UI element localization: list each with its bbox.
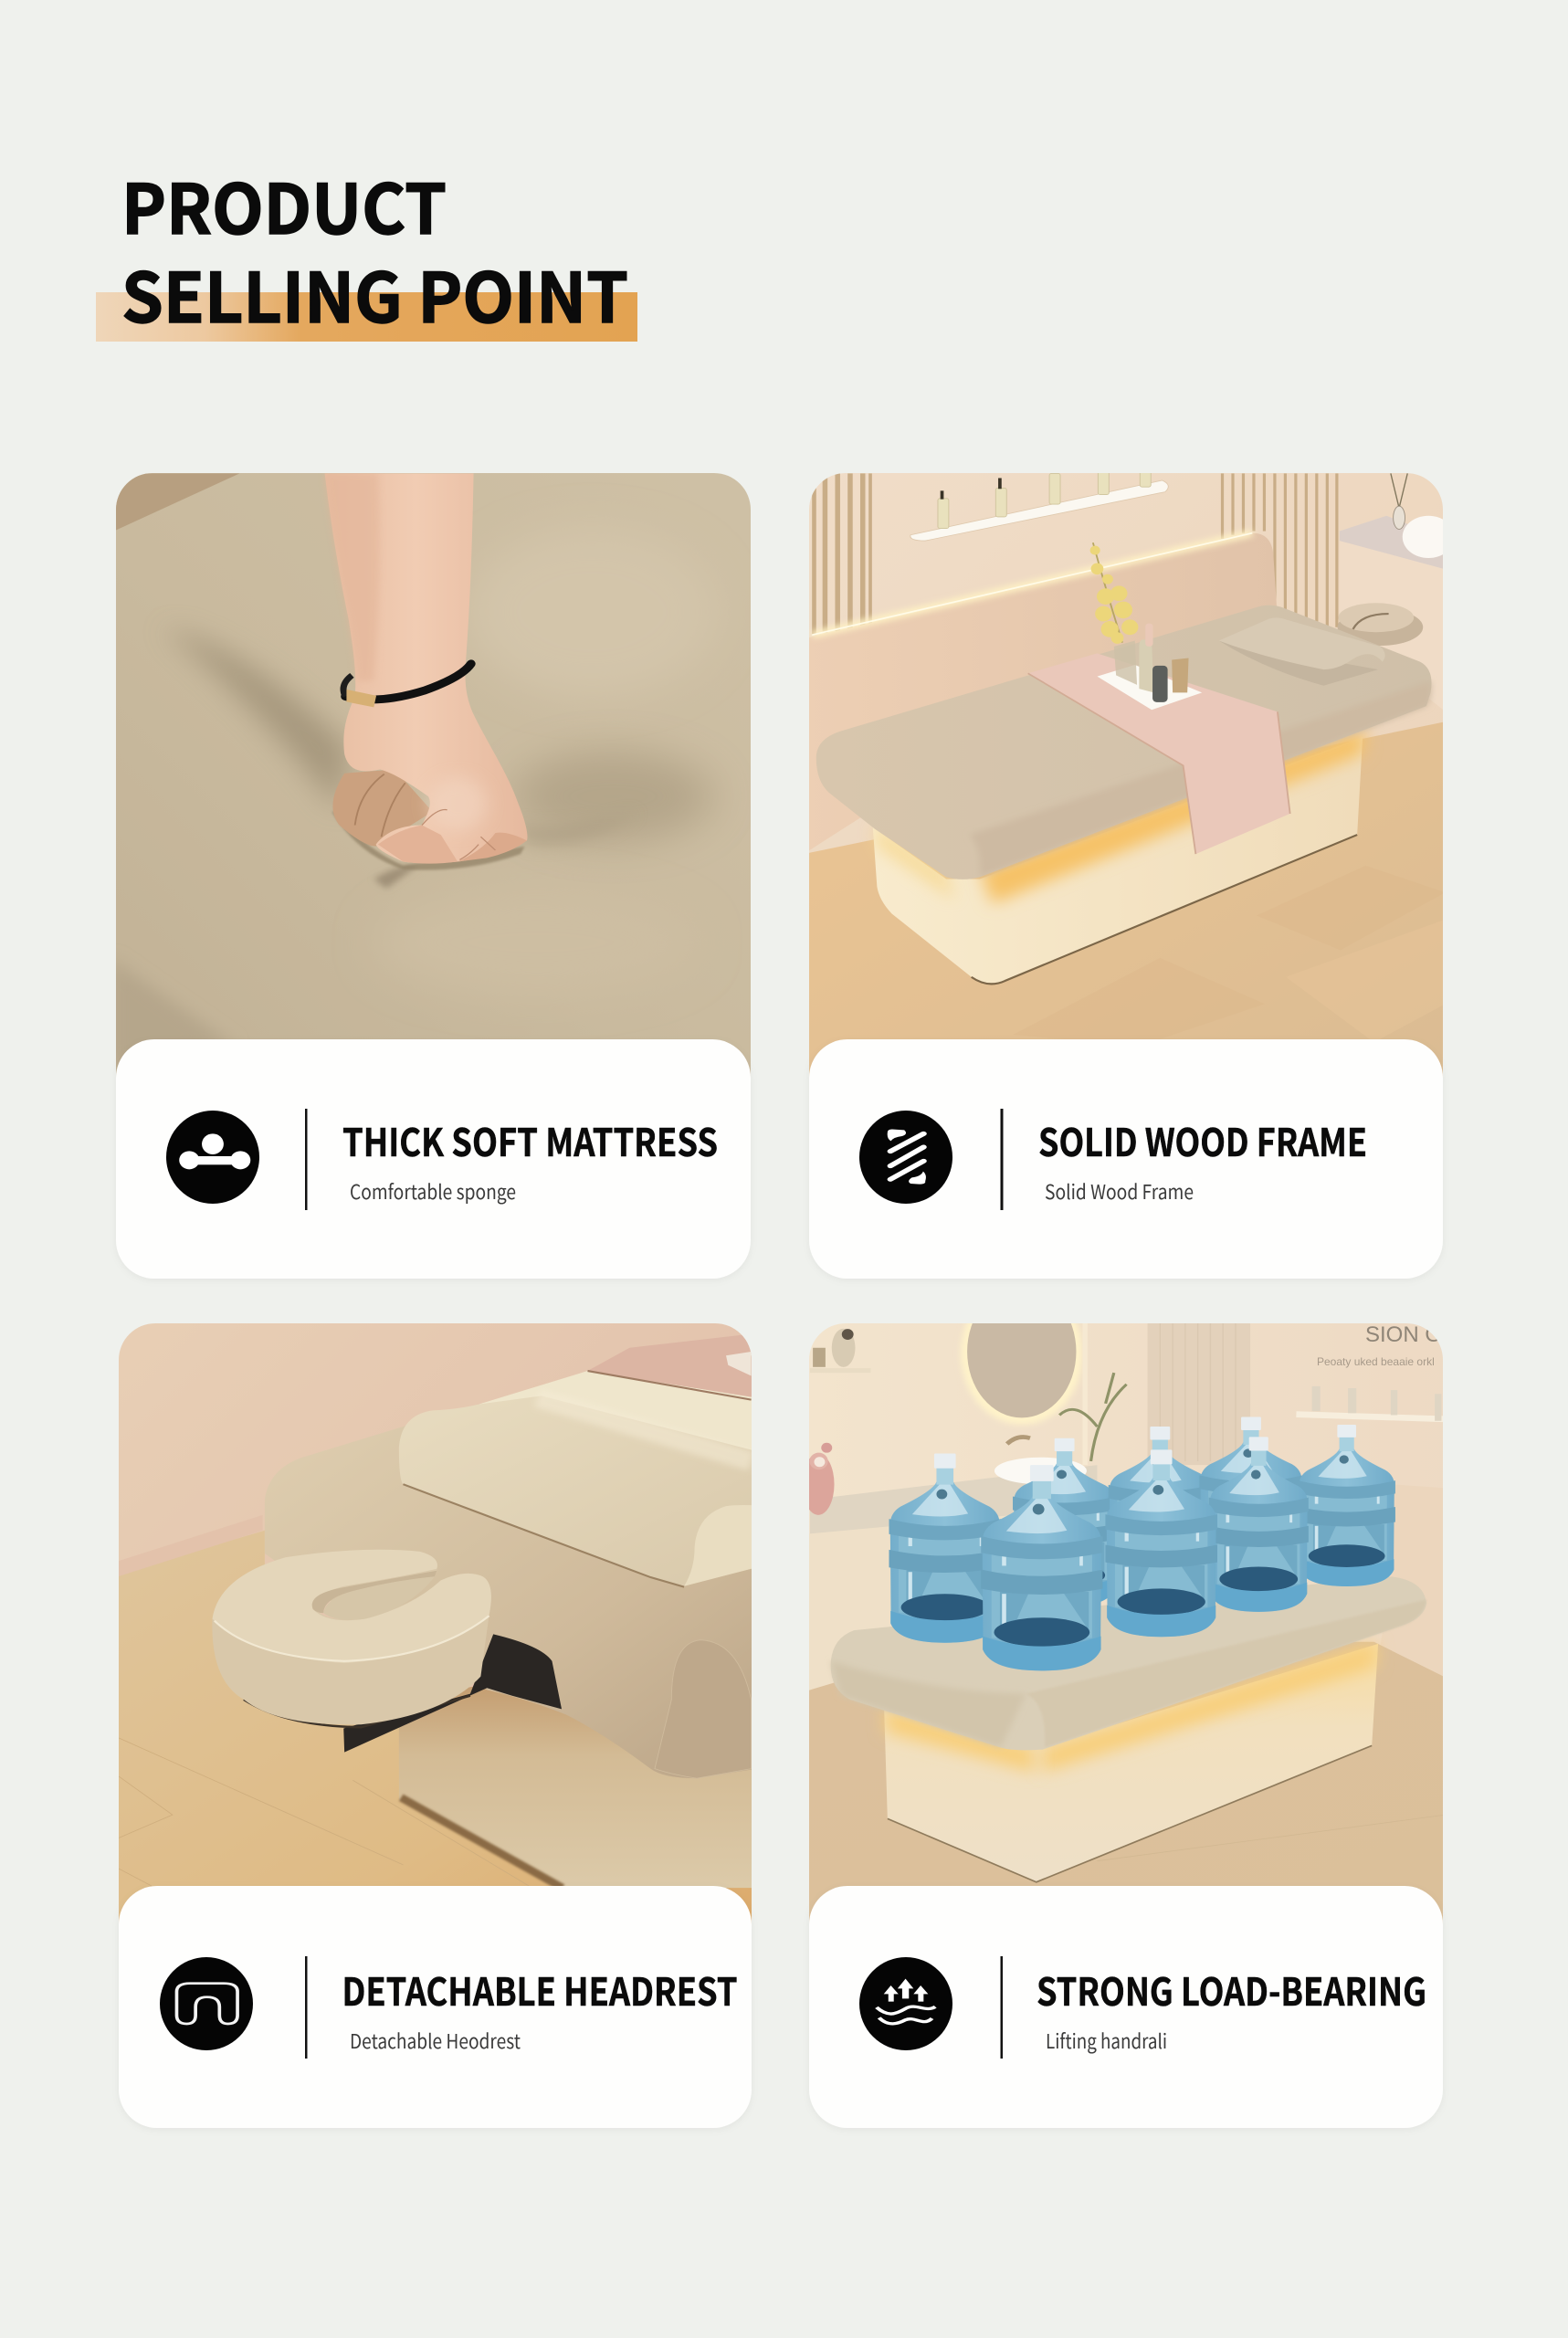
heading: SOLID WOOD FRAME <box>1038 1112 1367 1168</box>
subtext: Comfortable sponge <box>350 1176 516 1206</box>
title line 2: SELLING POINT <box>121 243 628 342</box>
wall sign small text: Peoaty uked beaaie orkl <box>1317 1355 1435 1368</box>
subtext: Lifting handrali <box>1046 2026 1167 2055</box>
card: strong load-bearing <box>809 1886 1443 2128</box>
panel: detachable headrest <box>110 1315 781 2128</box>
panel: thick soft mattress <box>110 466 781 1279</box>
icon: horseshoe headrest <box>160 1957 253 2050</box>
icon: wood grain stripes <box>859 1111 952 1204</box>
heading: STRONG LOAD-BEARING <box>1037 1962 1426 2017</box>
divider <box>305 1956 307 2059</box>
card: thick soft mattress <box>116 1039 751 1279</box>
photo: headrest attached to bed <box>119 1323 752 1923</box>
panel: strong load-bearing <box>809 1323 1443 2128</box>
wall sign: SION OF <box>1365 1322 1456 1347</box>
photo: fist pressing mattress <box>116 473 751 1076</box>
heading: DETACHABLE HEADREST <box>342 1962 738 2017</box>
divider <box>1001 1109 1003 1210</box>
title line 1: PRODUCT <box>121 154 447 254</box>
subtext: Detachable Heodrest <box>350 2026 521 2055</box>
divider <box>305 1109 307 1210</box>
divider <box>1001 1956 1003 2059</box>
water bottles <box>889 1417 1395 1670</box>
card: detachable headrest <box>119 1886 752 2128</box>
icon: bone cushion <box>166 1111 259 1204</box>
photo: massage bed with lighting <box>809 473 1443 1077</box>
heading: THICK SOFT MATTRESS <box>342 1112 718 1168</box>
icon: arrows and waves <box>859 1957 952 2050</box>
subtext: Solid Wood Frame <box>1045 1176 1194 1206</box>
panel: solid wood frame <box>804 466 1475 1279</box>
photo: water bottles on bed <box>809 1323 1443 1923</box>
card: solid wood frame <box>809 1039 1443 1279</box>
infographic page <box>96 181 1443 2128</box>
title highlight bar <box>96 292 637 342</box>
title: product selling point <box>96 154 637 342</box>
